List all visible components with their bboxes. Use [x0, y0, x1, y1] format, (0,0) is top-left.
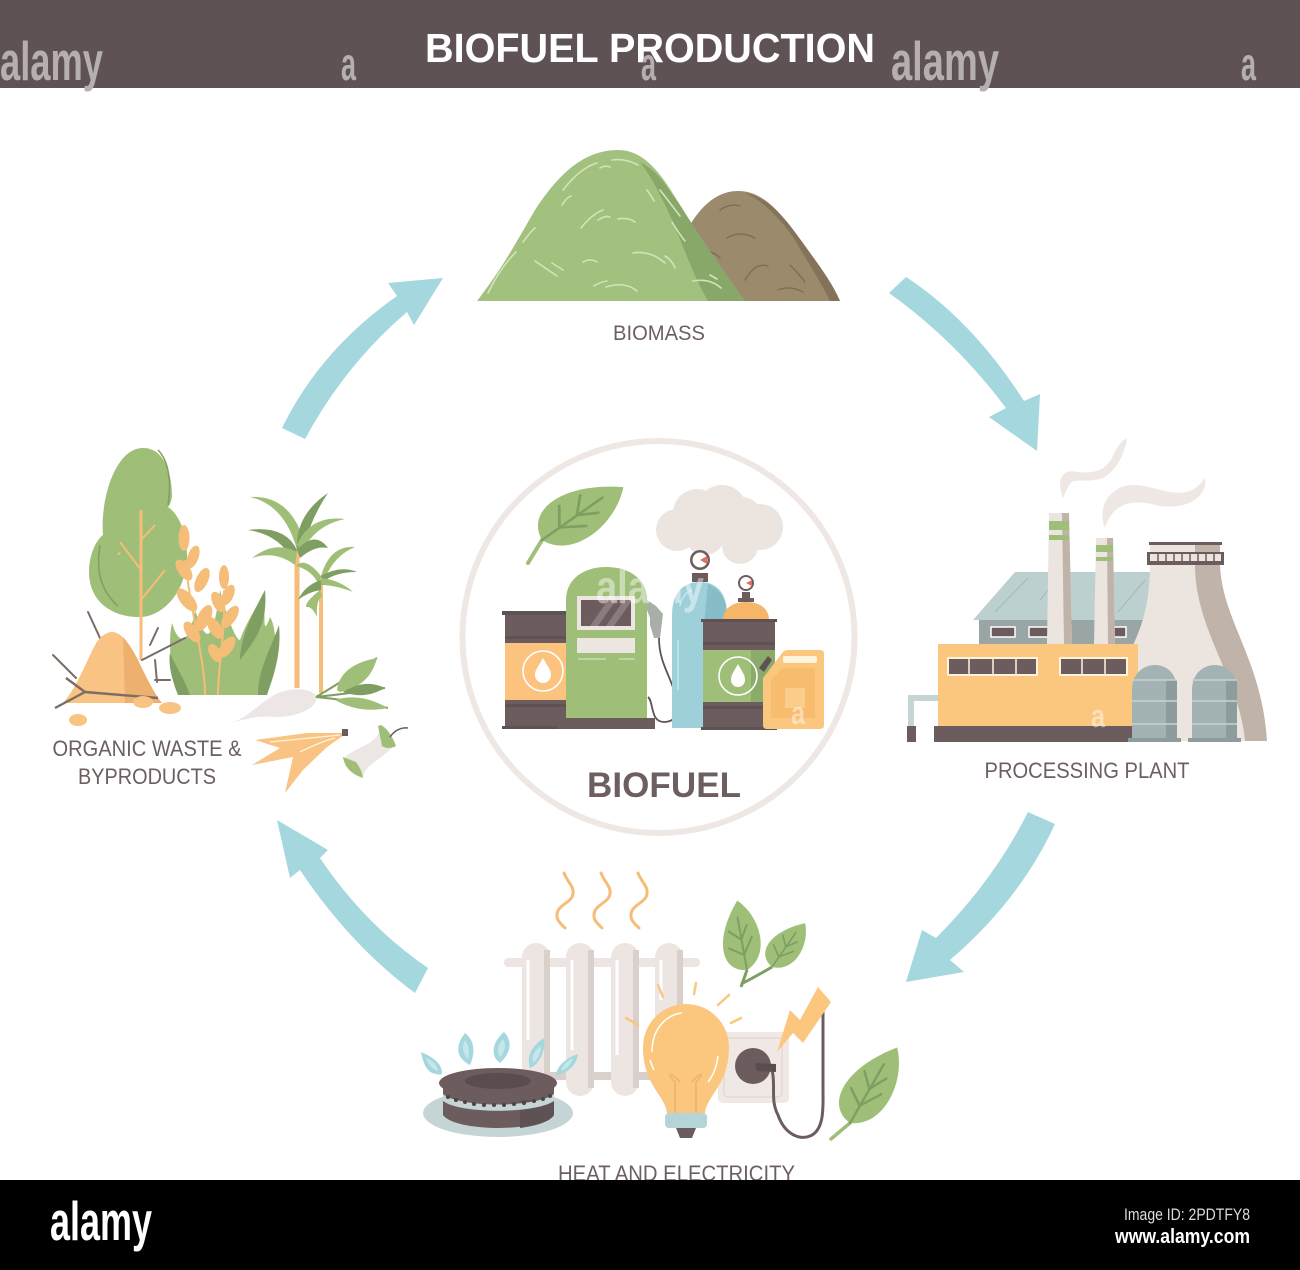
icon: lightning bolt — [777, 987, 831, 1052]
footer logo: alamy — [50, 1190, 152, 1252]
icon: grass — [169, 590, 280, 695]
icon: palm trees — [248, 493, 357, 693]
arrow: biomass to processing plant — [889, 277, 1040, 451]
icon: gas burner — [423, 1068, 573, 1137]
icon: wheat stalks — [172, 525, 242, 695]
icon: chimney short — [1094, 538, 1115, 644]
label: biomass: BIOMASS — [613, 322, 705, 345]
arrow: processing plant to heat and electricity — [906, 812, 1055, 982]
label: organic waste and byproducts — [52, 736, 242, 789]
icon: heat waves — [557, 873, 647, 928]
icon: fuel pump — [557, 567, 678, 729]
footer url: www.alamy.com — [1114, 1226, 1250, 1248]
arrow: organic waste to biomass — [282, 278, 443, 439]
watermark: header alamy: a — [641, 38, 656, 90]
panel: organic waste and byproducts — [52, 448, 408, 793]
icon: warehouse — [973, 572, 1150, 646]
header bar — [0, 0, 1300, 88]
icon: green pile — [477, 150, 745, 301]
watermark: header alamy: alamy — [0, 30, 103, 92]
icon: chimney tall — [1047, 513, 1072, 644]
icon: orange factory — [907, 644, 1138, 742]
icon: blue gas cylinder — [672, 550, 727, 728]
icon: light bulb — [643, 1004, 729, 1138]
icon: wall socket — [718, 1032, 789, 1103]
icon: smoke — [1060, 438, 1205, 528]
icon: orange gas cylinder — [723, 575, 769, 620]
icon: gas flames — [421, 1032, 578, 1075]
icon: leaf — [527, 465, 636, 563]
watermark: faint marks on illustration: a — [791, 695, 805, 731]
icon: twin leaves — [717, 898, 817, 987]
icon: large leaf — [829, 1034, 915, 1139]
watermark: faint marks on illustration: alamy — [596, 561, 704, 613]
watermark: header alamy: a — [341, 38, 356, 90]
icon: radiator — [504, 943, 700, 1096]
label: biofuel: BIOFUEL — [587, 766, 741, 805]
icon: storage tanks — [1128, 665, 1241, 742]
icon: light rays — [626, 983, 741, 1025]
icon: cooling tower — [1133, 542, 1267, 741]
watermark: header alamy: alamy — [891, 30, 999, 92]
watermark: faint marks on illustration — [596, 561, 1105, 734]
icon: parsnip — [232, 658, 388, 723]
icon: sticks — [53, 612, 185, 682]
watermark: faint marks on illustration: a — [1091, 698, 1105, 734]
icon: brown pile — [690, 191, 840, 301]
icon: tree — [89, 448, 187, 660]
icon: apple core — [343, 725, 408, 778]
watermark: header alamy — [0, 30, 1256, 92]
icon: banana peel — [252, 729, 348, 793]
label: organic waste and byproducts: ORGANIC WASTE & — [52, 736, 242, 761]
icon: hay pile — [55, 632, 181, 726]
icon: right barrel — [701, 619, 777, 730]
icon: jerrycan — [759, 650, 824, 729]
arrow: heat and electricity to organic waste — [277, 820, 428, 993]
panel: biofuel center — [462, 441, 854, 833]
title: BIOFUEL PRODUCTION — [425, 25, 875, 71]
footer image id: Image ID: 2PDTFY8 — [1124, 1205, 1250, 1224]
panel: biomass — [477, 150, 840, 345]
label: organic waste and byproducts: BYPRODUCTS — [78, 764, 216, 789]
icon: left barrel — [502, 611, 568, 729]
label: heat and electricity: HEAT AND ELECTRICITY — [558, 1161, 795, 1186]
footer bar — [0, 1180, 1300, 1270]
label: processing plant: PROCESSING PLANT — [984, 758, 1190, 783]
panel: heat and electricity — [421, 873, 915, 1186]
circle outline — [462, 441, 854, 833]
watermark: header alamy: a — [1241, 38, 1256, 90]
panel: processing plant — [907, 438, 1267, 783]
icon: plug and cable — [735, 1010, 823, 1137]
icon: smoke cloud — [656, 485, 783, 564]
